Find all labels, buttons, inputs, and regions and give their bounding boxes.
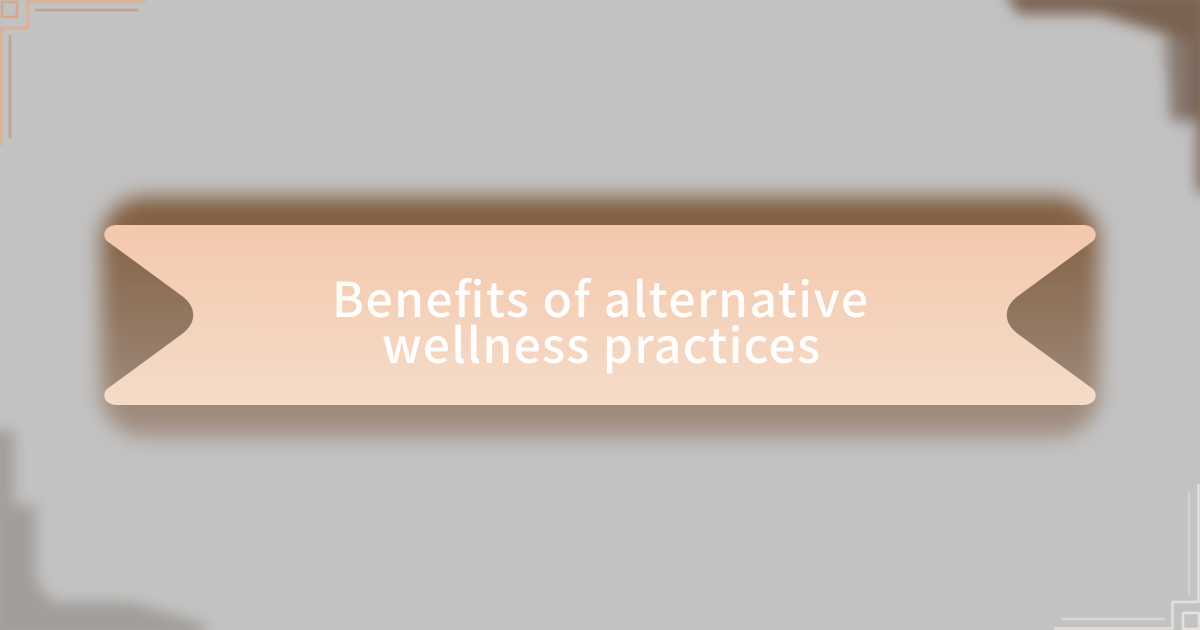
- blurred corner: bottom left: [0, 430, 205, 630]
- title: Benefits of alternative: [332, 261, 868, 331]
- ribbon shadow: [101, 197, 1099, 437]
- decorative frame: top left: [2, 2, 146, 146]
- decorative frame: bottom right: [1054, 484, 1199, 629]
- blurred corner: top right: [1004, 0, 1200, 192]
- title line two: wellness practices: [382, 307, 820, 377]
- ribbon banner: [104, 225, 1096, 405]
